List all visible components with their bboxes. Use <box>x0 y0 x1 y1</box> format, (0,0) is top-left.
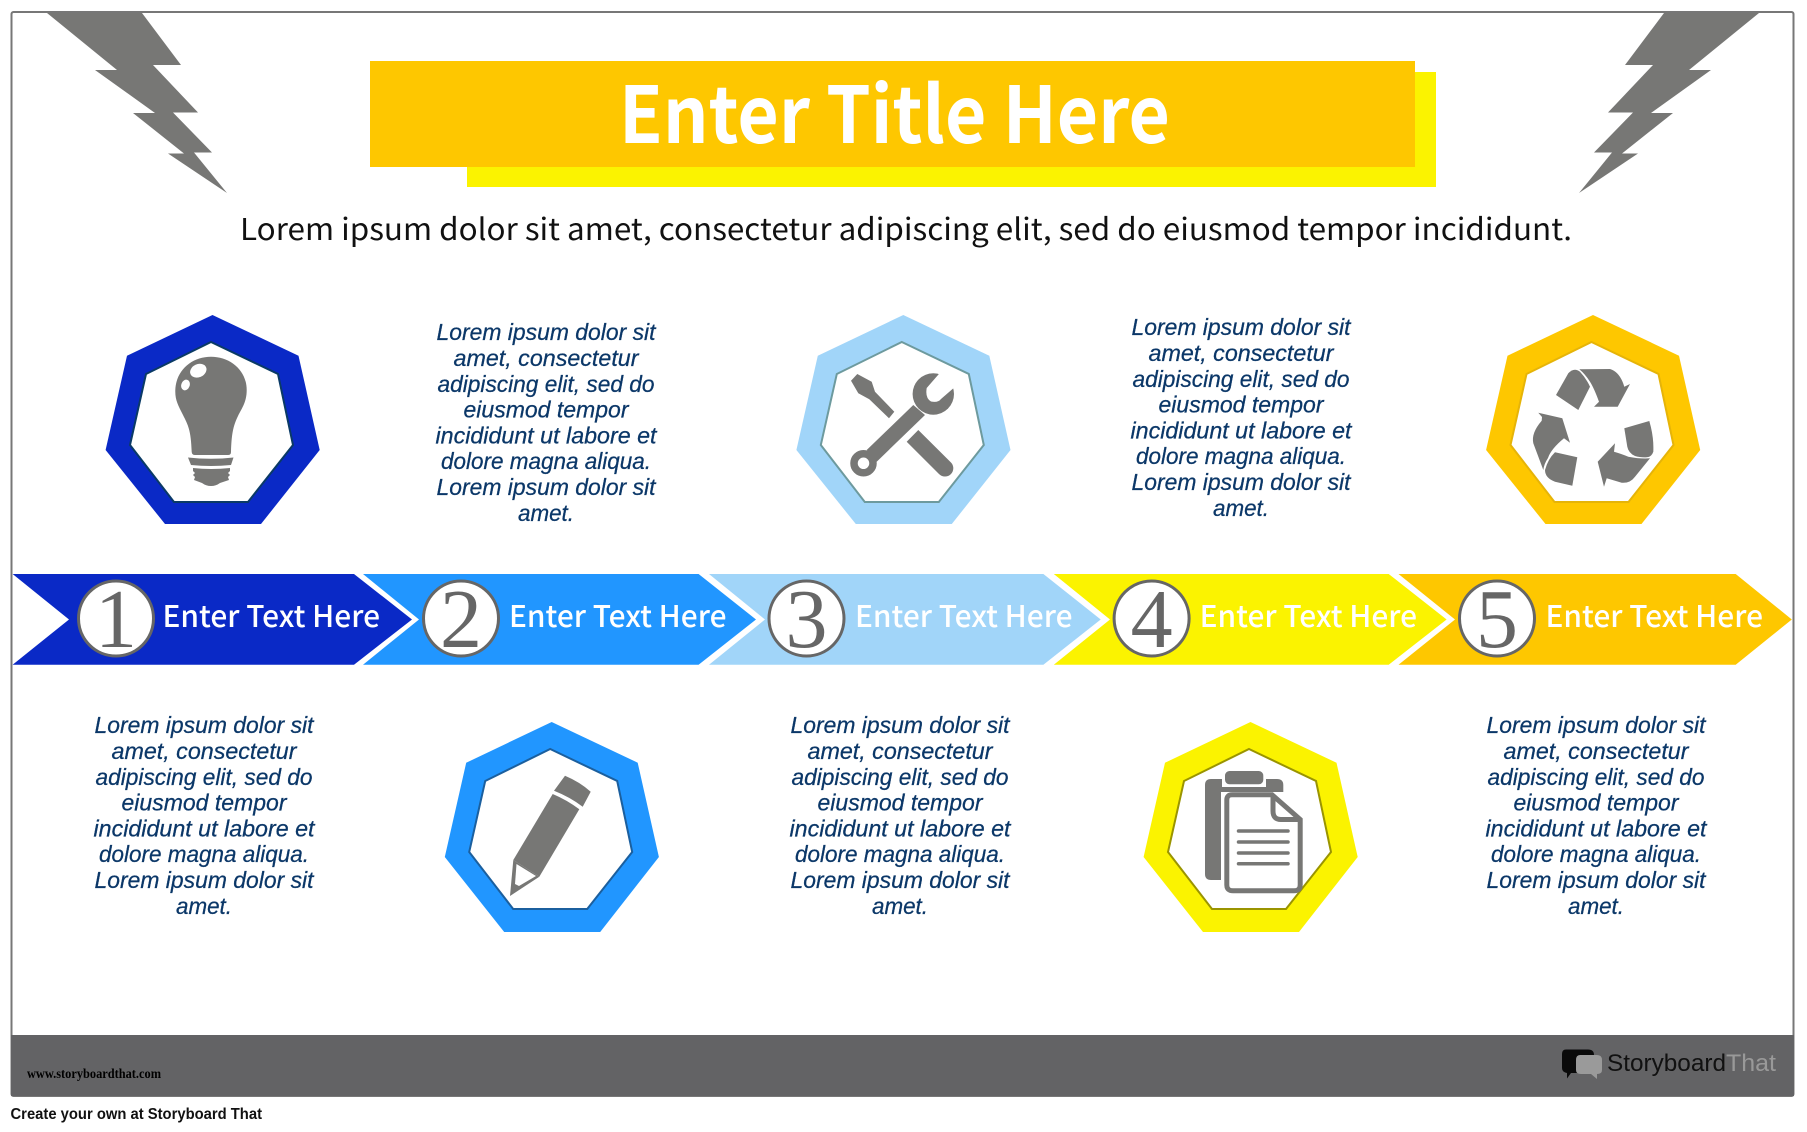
text block: bottom 2: dolore magna aliqua. <box>795 841 1005 867</box>
text block: bottom 1: incididunt ut labore et <box>94 816 316 842</box>
text block: top 1: adipiscing elit, sed do <box>438 371 655 397</box>
footer bar <box>11 1035 1794 1096</box>
icon: clipboard and document <box>1205 771 1300 891</box>
title banner <box>370 54 1436 187</box>
text block: bottom 1: adipiscing elit, sed do <box>96 764 313 790</box>
text block: bottom 3: amet. <box>1568 893 1624 919</box>
text block: top 2: amet. <box>1213 495 1269 521</box>
subtitle: Lorem ipsum dolor sit amet, consectetur adipiscing elit, sed do eiusmod tempor incididunt. <box>240 205 1572 249</box>
icon: light bulb <box>175 357 247 486</box>
text block: top 2: Lorem ipsum dolor sit <box>1132 469 1352 495</box>
step 5 number and label <box>1460 573 1763 666</box>
text block: bottom 1: eiusmod tempor <box>122 790 288 816</box>
text block: top 1: Lorem ipsum dolor sit <box>436 319 657 345</box>
text block: bottom 2: Lorem ipsum dolor sit <box>790 712 1011 738</box>
text block: bottom 3: Lorem ipsum dolor sit <box>1486 712 1707 738</box>
icon: right lightning bolt <box>1579 13 1759 193</box>
step 2 number and label: 2 <box>440 573 482 666</box>
process arrow 2 <box>363 574 756 665</box>
text block: bottom 1 <box>94 712 316 919</box>
panel: heptagon 1 with light bulb <box>106 315 320 524</box>
icon: left lightning bolt <box>47 13 227 193</box>
text block: top 2: dolore magna aliqua. <box>1136 443 1346 469</box>
text block: bottom 1: amet, consectetur <box>112 738 298 764</box>
step 3 number and label: 3 <box>786 573 828 666</box>
text block: top 2: amet, consectetur <box>1148 340 1335 366</box>
logo: That <box>1726 1050 1776 1077</box>
icon: pencil <box>510 776 591 896</box>
text block: top 2 <box>1130 314 1353 521</box>
text block: bottom 1: Lorem ipsum dolor sit <box>94 867 315 893</box>
step 5 number and label: Enter Text Here <box>1546 592 1763 636</box>
process arrow 4 <box>1054 574 1447 665</box>
text block: bottom 2: amet, consectetur <box>808 738 994 764</box>
step 1 number and label: 1 <box>95 573 137 666</box>
text block: top 1: amet. <box>518 500 574 526</box>
text block: top 1: Lorem ipsum dolor sit <box>436 474 657 500</box>
text block: bottom 3: incididunt ut labore et <box>1486 816 1708 842</box>
panel: heptagon 4 with document <box>1144 722 1358 932</box>
text block: top 2: incididunt ut labore et <box>1130 418 1353 444</box>
footer url: www.storyboardthat.com <box>27 1067 161 1082</box>
text block: top 1 <box>436 319 658 526</box>
text block: bottom 2: amet. <box>872 893 928 919</box>
text block: bottom 1: dolore magna aliqua. <box>99 841 309 867</box>
logo <box>1562 1050 1776 1079</box>
attribution: Create your own at Storyboard That <box>10 1106 262 1123</box>
panel: heptagon 3 with tools <box>796 315 1010 524</box>
text block: bottom 1: Lorem ipsum dolor sit <box>94 712 315 738</box>
step 5 number and label: 5 <box>1476 573 1518 666</box>
text block: top 2: Lorem ipsum dolor sit <box>1132 314 1352 340</box>
step 4 number and label: Enter Text Here <box>1200 592 1417 636</box>
process arrow 3 <box>709 574 1101 665</box>
step 4 number and label <box>1114 573 1417 666</box>
panel: heptagon 5 with recycle symbol <box>1486 315 1700 524</box>
text block: top 1: incididunt ut labore et <box>436 422 658 448</box>
logo: Storyboard <box>1607 1050 1726 1077</box>
step 2 number and label <box>424 573 726 666</box>
text block: bottom 2 <box>790 712 1012 919</box>
title: Enter Title Here <box>619 54 1170 166</box>
text block: bottom 3: Lorem ipsum dolor sit <box>1486 867 1707 893</box>
process arrow 5 <box>1398 574 1792 665</box>
step 1 number and label: Enter Text Here <box>162 592 380 636</box>
panel: heptagon 2 with pencil <box>445 722 659 932</box>
text block: bottom 3: amet, consectetur <box>1504 738 1690 764</box>
text block: bottom 3 <box>1486 712 1708 919</box>
step 2 number and label: Enter Text Here <box>509 592 726 636</box>
step 3 number and label: Enter Text Here <box>855 592 1072 636</box>
text block: bottom 3: eiusmod tempor <box>1514 790 1680 816</box>
text block: bottom 3: dolore magna aliqua. <box>1491 841 1701 867</box>
text block: bottom 2: adipiscing elit, sed do <box>792 764 1009 790</box>
icon: recycle arrows <box>1533 369 1653 487</box>
step 4 number and label: 4 <box>1131 573 1173 666</box>
text block: top 1: amet, consectetur <box>454 345 640 371</box>
icon: wrench and screwdriver <box>851 371 958 477</box>
process arrow 1 <box>13 574 412 665</box>
text block: bottom 2: incididunt ut labore et <box>790 816 1012 842</box>
text block: bottom 2: Lorem ipsum dolor sit <box>790 867 1011 893</box>
text block: top 1: eiusmod tempor <box>464 396 630 422</box>
step 3 number and label <box>769 573 1072 666</box>
text block: top 2: eiusmod tempor <box>1158 392 1325 418</box>
text block: bottom 3: adipiscing elit, sed do <box>1488 764 1705 790</box>
text block: top 2: adipiscing elit, sed do <box>1132 366 1350 392</box>
text block: top 1: dolore magna aliqua. <box>441 448 651 474</box>
step 1 number and label <box>78 573 380 666</box>
text block: bottom 1: amet. <box>176 893 232 919</box>
text block: bottom 2: eiusmod tempor <box>818 790 984 816</box>
